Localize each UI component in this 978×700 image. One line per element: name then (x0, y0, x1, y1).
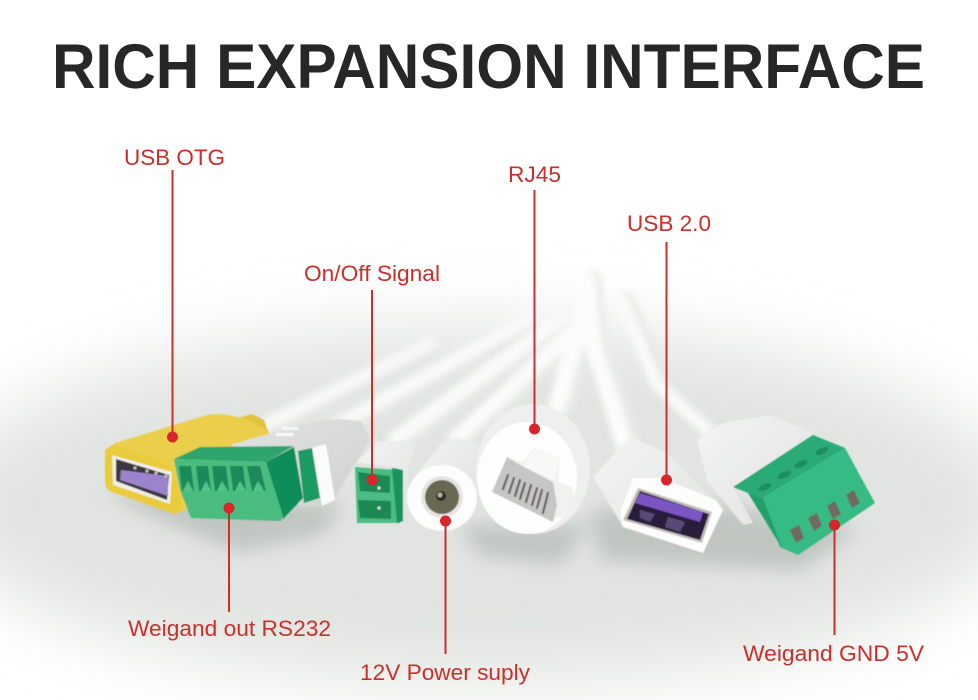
leader line: 12V Power suply (440, 516, 451, 654)
connector: 12V power jack (407, 437, 480, 531)
label: Weigand GND 5V: Weigand GND 5V (743, 641, 924, 666)
USB port (112, 455, 172, 504)
leader line: Weigand GND 5V (829, 520, 840, 635)
floor shading (0, 327, 978, 683)
connector: USB OTG yellow (105, 414, 290, 514)
label: On/Off Signal: On/Off Signal (304, 261, 440, 286)
contact shadows (105, 490, 860, 570)
label: USB OTG: USB OTG (124, 145, 225, 170)
label: Weigand out RS232: Weigand out RS232 (128, 616, 331, 641)
connector: grey plug behind green terminal (230, 419, 370, 508)
leader line: RJ45 (529, 190, 540, 434)
connector: RJ45 (476, 404, 590, 534)
leader line: Weigand out RS232 (224, 502, 234, 612)
white cables (262, 280, 712, 447)
title: RICH EXPANSION INTERFACE (52, 32, 925, 102)
label: USB 2.0: USB 2.0 (627, 211, 711, 236)
connector: USB 2.0 white (593, 437, 723, 553)
leader line: USB 2.0 (661, 242, 672, 486)
connector: On/Off Signal (355, 440, 417, 523)
leader line: On/Off Signal (366, 290, 378, 486)
label: 12V Power suply: 12V Power suply (360, 660, 531, 685)
label: RJ45: RJ45 (508, 162, 561, 187)
connector: Weigand GND white housing (697, 415, 813, 525)
leader line: USB OTG (167, 170, 178, 442)
connector: Weigand out green terminal (174, 446, 303, 521)
connector: Weigand GND green terminal (733, 435, 875, 555)
